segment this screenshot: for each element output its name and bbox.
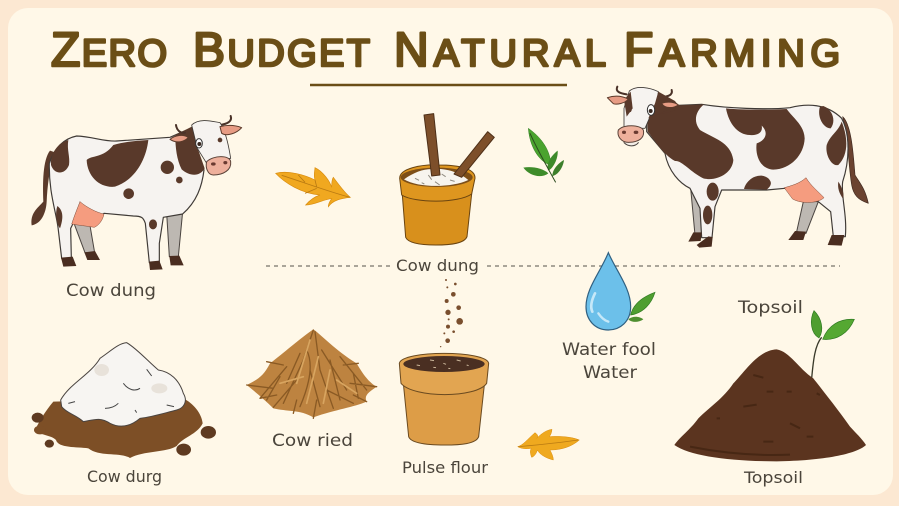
title: ZERO [51,24,167,77]
title: BUDGET [193,24,370,77]
label: water fool water: Water fool [562,340,656,360]
label: cow ried: Cow ried [272,431,353,451]
icon: yellow leaf top [276,168,350,207]
icon: white mound on dung [32,343,216,458]
icon: green leaves top [523,128,564,182]
label: water fool water [562,340,656,383]
icon: right cow [607,87,868,248]
icon: topsoil pile with seedling [674,311,866,461]
icon: left cow [31,116,242,270]
icon: pot with pulse flour [399,353,489,445]
label: topsoil bottom: Topsoil [743,468,803,487]
label: topsoil top: Topsoil [737,298,803,318]
dashed divider [266,265,840,267]
label: water fool water: Water [583,363,637,383]
icon: yellow leaf bottom [518,429,579,460]
icon: falling seeds [440,279,463,347]
icon: pot with sticks [400,114,494,245]
title [51,24,840,85]
icon: straw pile [247,329,377,418]
title: FARMING [624,24,840,77]
icon: water drop with leaf [586,253,655,330]
label: cow dung center: Cow dung [396,256,479,275]
label: pulse flour: Pulse flour [402,458,488,477]
title: NATURAL [394,24,606,77]
label: cow dung left: Cow dung [66,281,156,301]
label: cow durg: Cow durg [87,467,162,486]
